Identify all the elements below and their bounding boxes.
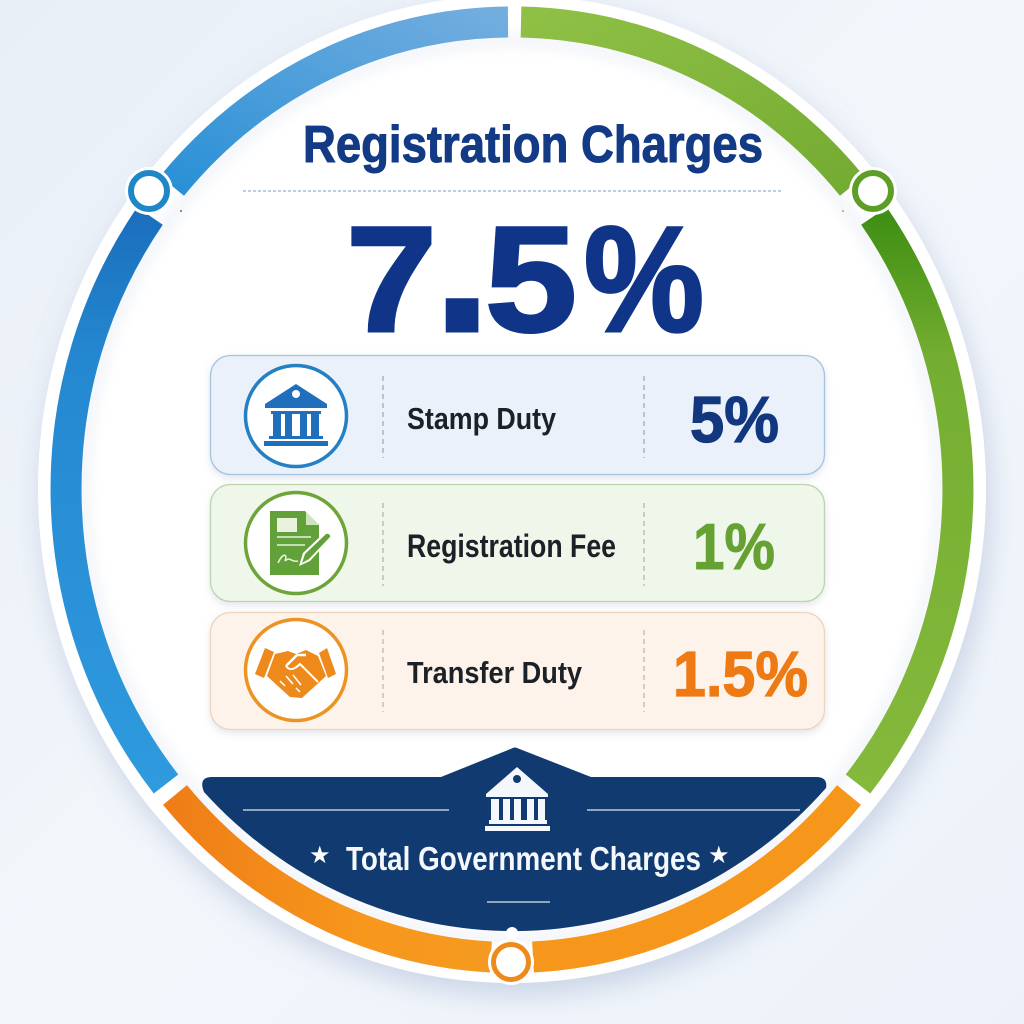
card background: [210, 612, 824, 730]
panel: stamp duty row: [210, 356, 824, 474]
ring segment: blue left: [66, 216, 166, 784]
ring segment: green top: [521, 22, 852, 186]
icon: bank building: [246, 366, 346, 466]
ring segment: orange right: [533, 795, 849, 957]
value: 1%: [693, 510, 775, 583]
headline value: [346, 141, 704, 376]
icon: government building: [485, 767, 550, 831]
label: Registration Fee: [407, 528, 616, 564]
card background: [210, 484, 824, 602]
headline value: .: [433, 141, 491, 376]
ring segment: blue top: [172, 22, 508, 186]
ring segment: green right: [858, 216, 958, 784]
banner shape: [202, 748, 826, 931]
banner: total government charges: [202, 748, 826, 931]
value: 1.5%: [673, 638, 808, 710]
headline value: %: [584, 195, 704, 363]
title divider: [243, 190, 782, 192]
banner label: Total Government Charges: [346, 840, 701, 877]
star left: ★: [309, 841, 331, 869]
panel: registration fee row: [210, 484, 824, 602]
title: Registration Charges: [303, 116, 763, 174]
banner rules: [243, 810, 800, 902]
node: green ring marker: [849, 167, 897, 215]
panel: transfer duty row: [210, 612, 824, 730]
icon: signed document: [246, 492, 346, 594]
card background: [210, 356, 824, 474]
icon: handshake: [246, 620, 346, 720]
node: blue ring marker: [125, 167, 173, 215]
headline value: 5: [485, 195, 577, 363]
value: 5%: [690, 383, 779, 456]
star right: ★: [708, 841, 730, 869]
headline value: 7: [346, 195, 437, 363]
ring segment: orange left: [175, 795, 491, 957]
ring: segmented circular frame: [66, 22, 958, 957]
inner ring shadow: [84, 41, 940, 939]
label: Transfer Duty: [407, 655, 583, 690]
label: Stamp Duty: [407, 401, 557, 436]
node: orange ring marker: [488, 927, 534, 985]
